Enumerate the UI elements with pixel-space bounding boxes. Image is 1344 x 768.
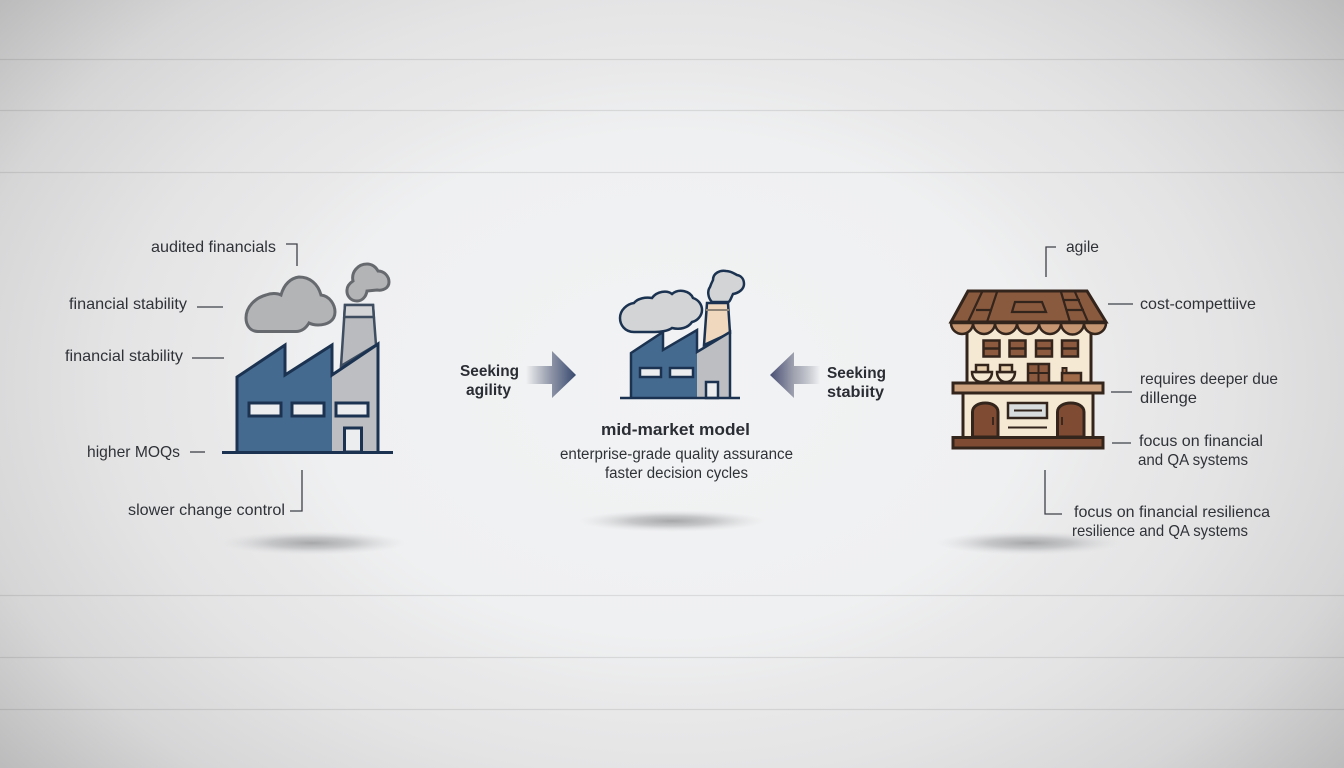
arrow group: seeking stability: stabiity xyxy=(827,384,884,401)
icon: shop xyxy=(951,291,1106,448)
label: focus on financial resilience xyxy=(1045,470,1270,540)
arrow group: seeking agility: agility xyxy=(466,382,511,399)
label: requires deeper due diligence xyxy=(1111,371,1278,407)
ground shadow: mid-market xyxy=(578,510,766,532)
text: mid-market description xyxy=(560,446,793,482)
label: agile xyxy=(1046,239,1099,277)
label: agile: agile xyxy=(1066,239,1099,256)
ground shadow: factory xyxy=(218,531,406,555)
text: seeking agility: Seeking xyxy=(460,363,519,380)
label: slower change control xyxy=(128,470,302,519)
label: focus on financial resilience: resilience and QA systems xyxy=(1072,523,1248,540)
label: focus on financial resilience: focus on financial resilienca xyxy=(1074,504,1270,521)
panel: large enterprise factory xyxy=(65,239,406,555)
ground shadow: shop xyxy=(936,531,1124,555)
title: mid-market model: mid-market model xyxy=(601,420,750,439)
label: requires deeper due diligence: dillenge xyxy=(1140,390,1197,407)
icon: factory xyxy=(222,264,393,452)
label: financial stability 1: financial stability xyxy=(69,296,187,313)
arrow: right xyxy=(526,351,576,398)
label: requires deeper due diligence: requires deeper due xyxy=(1140,371,1278,388)
icon: mid-market factory xyxy=(620,271,744,398)
label: audited financials: audited financials xyxy=(151,239,276,256)
label: cost-competitive: cost-compettiive xyxy=(1140,296,1256,313)
label: slower change control: slower change control xyxy=(128,502,285,519)
label: focus on financial and QA systems: focus on financial xyxy=(1139,433,1263,450)
label: audited financials xyxy=(151,239,297,266)
text: mid-market description: faster decision cycles xyxy=(605,465,748,482)
label: focus on financial and QA systems: and QA systems xyxy=(1138,452,1248,469)
arrow group: seeking agility xyxy=(460,351,576,399)
label: focus on financial and QA systems xyxy=(1112,433,1263,469)
panel: mid-market model xyxy=(560,271,793,532)
arrow: left xyxy=(770,352,820,398)
text: mid-market description: enterprise-grade quality assurance xyxy=(560,446,793,463)
label: financial stability 2: financial stability xyxy=(65,348,183,365)
panel: small agile shop xyxy=(936,239,1278,555)
label: higher MOQs: higher MOQs xyxy=(87,444,180,461)
arrow group: seeking stability xyxy=(770,352,886,401)
text: seeking stability: Seeking xyxy=(827,365,886,382)
